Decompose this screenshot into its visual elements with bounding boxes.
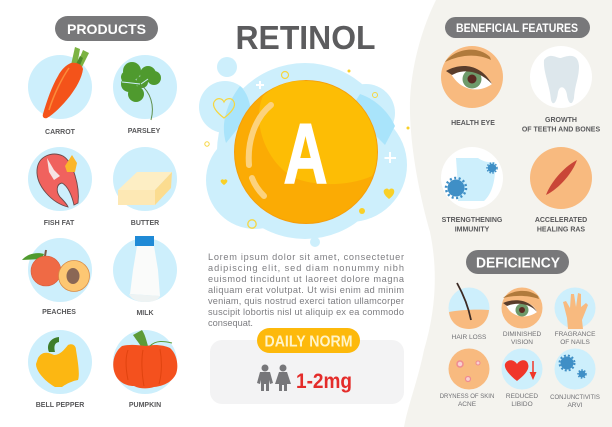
item: reduced libido: LIBIDO <box>511 401 533 408</box>
item: dryness acne: ACNE <box>458 401 477 408</box>
item: hair loss <box>448 283 490 341</box>
description text: Lorem ipsum dolor sit amet, consectetuer <box>208 252 404 262</box>
item: dryness acne <box>440 348 494 408</box>
item: carrot: CARROT <box>45 129 76 136</box>
item: conjunctivitis <box>550 348 600 409</box>
item: conjunctivitis: CONJUNCTIVITIS <box>550 395 600 401</box>
item: milk <box>113 236 177 317</box>
icon: plus <box>256 81 396 163</box>
item: butter: BUTTER <box>131 220 159 227</box>
icon: people <box>257 364 291 391</box>
heading: deficiency: DEFICIENCY <box>476 256 560 272</box>
item: conjunctivitis: ARVI <box>567 402 583 409</box>
item: pumpkin <box>113 330 177 409</box>
item: immunity: STRENGTHENING <box>442 217 503 224</box>
item: health eye <box>441 46 503 127</box>
item: fish fat: FISH FAT <box>44 220 75 227</box>
item: peaches <box>22 238 92 316</box>
vitamin capsule <box>234 80 378 224</box>
item: immunity: IMMUNITY <box>455 226 490 234</box>
description text <box>208 252 405 328</box>
item: healing wound <box>530 147 592 234</box>
heading: beneficial features: BENEFICIAL FEATURES <box>456 23 578 35</box>
item: bell pepper: BELL PEPPER <box>36 402 84 409</box>
letter A: A <box>284 107 328 202</box>
item: healing wound: HEALING RAS <box>537 226 585 234</box>
item: reduced libido <box>502 348 542 408</box>
badge: daily norm <box>257 328 360 353</box>
item: immunity <box>441 147 503 234</box>
item: hair loss: HAIR LOSS <box>452 334 487 341</box>
item: butter <box>113 147 177 227</box>
description text: consequat. <box>208 318 253 328</box>
title: RETINOL <box>236 19 376 56</box>
item: tooth: GROWTH <box>545 117 577 124</box>
item: diminished vision: VISION <box>511 339 533 346</box>
item: tooth <box>522 46 600 134</box>
description text: veniam, quis nostrud exerci tation ullamcorper <box>208 296 404 306</box>
item: tooth: OF TEETH AND BONES <box>522 126 600 134</box>
item: diminished vision <box>502 288 542 346</box>
icon: yellow heart <box>384 188 394 199</box>
item: parsley: PARSLEY <box>128 128 161 135</box>
item: nails: FRAGRANCE <box>555 331 596 338</box>
item: carrot <box>28 47 92 136</box>
item: healing wound: ACCELERATED <box>535 217 587 224</box>
item: milk: MILK <box>136 310 154 317</box>
item: peaches: PEACHES <box>42 309 76 316</box>
item: reduced libido: REDUCED <box>506 393 538 400</box>
panel: daily norm <box>210 328 404 404</box>
item: fish fat <box>28 147 92 227</box>
description text: euismod tincidunt ut laoreet dolore magna <box>208 274 405 284</box>
right background panel <box>404 0 612 427</box>
description text: adipiscing elit, sed diam nonummy nibh <box>208 263 404 273</box>
description text: aliquam erat volutpat. Ut wisi enim ad minim <box>208 285 404 295</box>
panel: deficiency <box>440 250 600 409</box>
item: nails: OF NAILS <box>560 339 590 346</box>
badge: daily norm: DAILY NORM <box>264 334 352 350</box>
item: pumpkin: PUMPKIN <box>129 402 161 409</box>
panel: products <box>22 16 177 409</box>
item: parsley <box>113 55 177 135</box>
dose value: 1-2mg <box>296 370 352 393</box>
panel: beneficial features <box>441 17 600 234</box>
vitamin A illustration <box>199 57 410 247</box>
item: dryness acne: DRYNESS OF SKIN <box>440 394 494 400</box>
heading: products <box>55 16 158 41</box>
item: health eye: HEALTH EYE <box>451 120 495 127</box>
icon: heart outline <box>213 99 235 118</box>
heading: products: PRODUCTS <box>67 21 146 37</box>
item: nails <box>554 288 596 346</box>
heading: deficiency <box>466 250 569 274</box>
highlight <box>249 105 271 165</box>
description text: suscipit lobortis nisl ut aliquip ex ea commodo <box>208 307 404 317</box>
item: diminished vision: DIMINISHED <box>503 331 541 338</box>
item: bell pepper <box>28 330 92 409</box>
heading: beneficial features <box>445 17 590 38</box>
